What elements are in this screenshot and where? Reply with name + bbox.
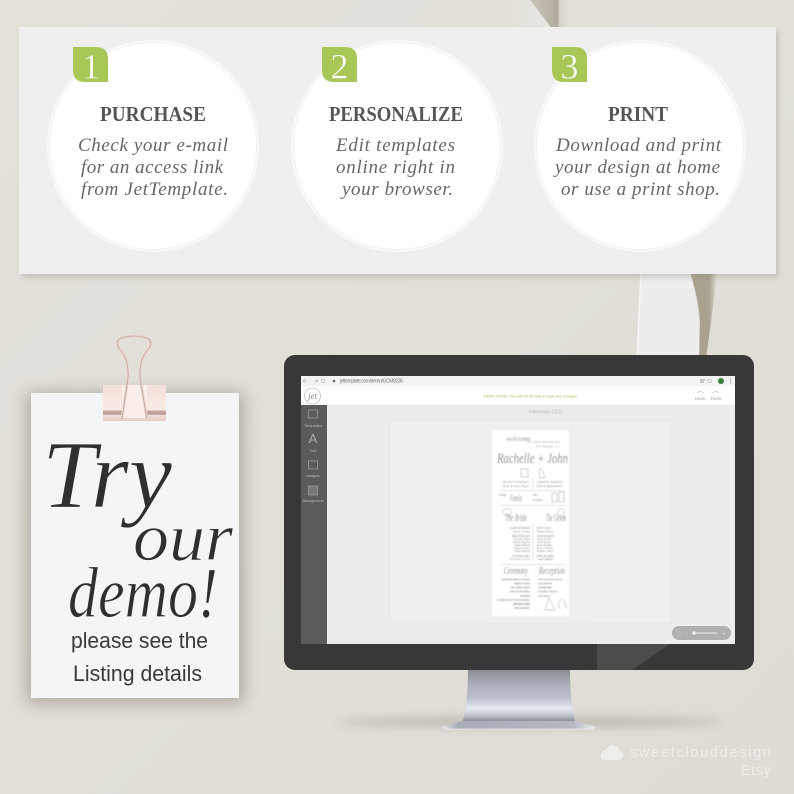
wedding program: WELCOME WORDS	[510, 586, 530, 590]
app header: jet	[307, 391, 317, 401]
wedding program: RING BEARER	[537, 555, 554, 558]
monitor stand	[442, 670, 596, 729]
white ribbon behind the monitor	[637, 272, 717, 358]
body print	[553, 135, 722, 200]
wedding program: 8.00 FIRST DANCE	[538, 590, 558, 594]
badge 2: 2	[330, 46, 348, 86]
wedding program: BRIDESMAIDS	[512, 535, 530, 538]
heading purchase: PURCHASE	[100, 102, 206, 126]
binder clip	[103, 336, 166, 421]
body print: or use a print shop.	[561, 179, 720, 200]
brand name: sweetclouddesign	[630, 745, 771, 761]
wedding program: Hope Martin	[515, 550, 531, 553]
wedding program: & SMALL	[533, 499, 544, 502]
wedding program: EVERY	[499, 494, 507, 497]
wedding program: 7.00 SPEECHES	[538, 586, 552, 590]
wedding program: FINAL BLESSING	[514, 607, 530, 610]
sidebar	[301, 405, 327, 644]
wedding program: PRAYERS	[520, 595, 530, 598]
wedding program: Kurt Holden	[537, 544, 553, 547]
wedding program: 6.00 DINNER	[538, 582, 552, 586]
card shadow	[26, 392, 244, 704]
body purchase: Check your e-mail	[78, 135, 228, 156]
heading personalize: PERSONALIZE	[329, 102, 463, 126]
wedding program: BRIDE'S PARENTS	[503, 481, 530, 484]
body purchase	[78, 135, 228, 200]
heading print: PRINT	[608, 102, 668, 126]
wedding program: Katrina Carson	[510, 558, 531, 561]
ribbon fold top right	[500, 0, 567, 30]
wedding program: WEDDING PARTY ENTERS	[501, 578, 530, 582]
browser bar: jettemplate.com/demo/GCM8235	[339, 379, 403, 385]
script headline: Try	[42, 421, 172, 528]
wedding program: 9.00 PARTY	[538, 595, 551, 598]
script headline: demo!	[68, 553, 218, 633]
browser bar	[301, 376, 735, 386]
brand name: Etsy	[741, 763, 772, 779]
step 3: print	[535, 41, 745, 251]
sidebar: Templates	[304, 423, 322, 428]
caption	[71, 628, 208, 686]
sidebar: Images	[306, 473, 320, 478]
wedding program: MAID OF HONOR	[510, 527, 530, 530]
wedding program: Marina Bayles	[513, 541, 530, 544]
body print: your design at home	[553, 157, 720, 178]
wedding program: Kennet Allen	[537, 550, 554, 553]
sidebar: Background	[302, 498, 324, 503]
card: try our demo	[31, 393, 239, 698]
zoom control	[672, 626, 731, 640]
wedding program: BIG	[533, 494, 538, 497]
wedding program: King Evans	[537, 538, 551, 541]
body purchase: for an access link	[81, 157, 224, 178]
body purchase: from JetTemplate.	[81, 179, 228, 200]
brand name	[630, 745, 772, 779]
badge 3: 3	[560, 46, 578, 86]
badge 1	[73, 46, 108, 86]
wedding program: Simon Reyes	[537, 530, 553, 534]
badge 3	[552, 46, 587, 86]
wedding program: WE MADE IT!	[536, 446, 560, 448]
screen	[301, 376, 735, 644]
zoom control: +	[723, 631, 726, 637]
circle 3	[535, 41, 745, 251]
wedding program: TO OUR WEDDING	[527, 441, 560, 444]
wedding program: Rachelle + John	[496, 451, 568, 467]
app header: Undo	[695, 396, 706, 401]
wedding program: Ceremony	[504, 566, 528, 577]
cloud icon	[601, 746, 623, 760]
circle 2	[292, 41, 502, 251]
wedding program: BRIDE ENTERS	[514, 582, 530, 586]
badge 2	[322, 46, 357, 86]
wedding program: The Groom	[546, 513, 566, 524]
glass reflection	[597, 376, 735, 670]
panel shadow	[22, 31, 778, 277]
app header: DEMO MODE: You will not be able to save any changes.	[484, 394, 578, 398]
zoom control: -	[686, 631, 688, 637]
step 1: purchase	[48, 41, 258, 251]
step 2: personalize	[292, 41, 502, 251]
panel: three steps	[19, 27, 776, 274]
circle 1	[48, 41, 258, 251]
monitor ground shadow	[335, 718, 725, 726]
app header	[301, 386, 735, 405]
caption: please see the	[71, 628, 208, 653]
wedding program: Jack Bower	[537, 541, 551, 544]
wedding program: Angela Ross	[514, 547, 530, 550]
app header: Redo	[711, 396, 722, 401]
sidebar: A	[309, 431, 318, 446]
wedding program: EXCHANGE OF VOWS & RINGS	[497, 599, 530, 602]
wedding program: Kelly & Mark Andrews	[537, 485, 562, 488]
monitor	[284, 355, 754, 670]
wedding program: FIRST KISS TOGETHER	[513, 603, 530, 606]
wedding program: BEST MAN	[537, 527, 551, 530]
wedding program: Family	[510, 493, 522, 503]
wedding program	[492, 430, 569, 616]
wedding program: GROOMSMEN	[537, 535, 554, 538]
wedding program: Lake Campbell	[537, 558, 553, 561]
script headline: our	[133, 499, 234, 575]
wedding program: GROOM'S PARENTS	[537, 481, 564, 484]
wedding program: Christie Wells	[513, 538, 530, 541]
wedding program: Dave Wilkes	[537, 547, 553, 550]
wedding program: Reception	[538, 566, 565, 577]
body personalize: Edit templates	[335, 135, 455, 156]
wedding program: SPECIAL READING	[510, 590, 530, 594]
body personalize: your browser.	[340, 179, 453, 200]
script headline	[42, 421, 234, 633]
body personalize: online right in	[336, 157, 455, 178]
wedding program: Hope & Peter Hayes	[503, 485, 529, 488]
file name: kellyedge-2030	[529, 410, 563, 416]
body print: Download and print	[555, 135, 722, 156]
wedding program: Jamie Thomas	[514, 544, 530, 547]
wedding program: Sarah Greene	[513, 530, 531, 534]
caption: Listing details	[73, 661, 202, 686]
sidebar: Text	[309, 448, 318, 453]
canvas page	[390, 421, 671, 623]
watermark	[601, 745, 772, 779]
body personalize	[335, 135, 455, 200]
badge 1: 1	[82, 46, 100, 86]
wedding program: The Bride	[505, 513, 527, 524]
wedding program: FLOWER GIRL	[512, 555, 530, 558]
wedding program: welcome	[506, 435, 530, 443]
wedding program: 5.00 COCKTAIL HOUR	[538, 578, 562, 582]
